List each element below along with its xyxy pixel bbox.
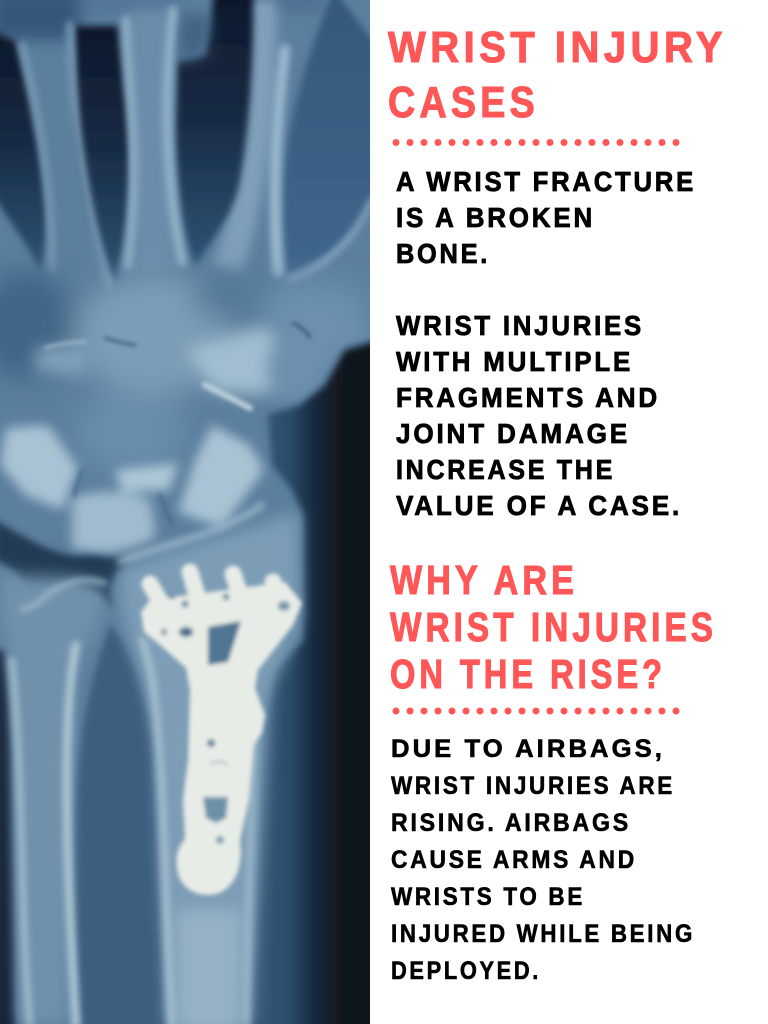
dark surround on right side [250,340,380,1024]
text block: airbags: CAUSE ARMS AND [391,846,637,874]
wrist joint gap and forearm void [0,520,165,1024]
dotted divider 1 [396,139,677,146]
text block: airbags: WRISTS TO BE [391,883,585,911]
heading: why on the rise [390,557,717,697]
title [388,23,727,127]
text block: airbags: DUE TO AIRBAGS, [391,735,665,763]
text block: definition: A WRIST FRACTURE [396,166,696,197]
carpal bones [0,270,370,553]
ulna and radius bones [0,505,300,1024]
text block: case value: VALUE OF A CASE. [396,490,682,521]
metal plate implant [141,572,302,895]
text block: definition: BONE. [396,238,490,269]
text block: airbags: RISING. AIRBAGS [391,809,631,837]
text block: airbags: WRIST INJURIES ARE [391,772,675,800]
text block: case value: JOINT DAMAGE [396,418,630,449]
dotted divider 2 [396,708,677,714]
text block: case value: WRIST INJURIES [396,310,644,341]
x-ray photo of a wrist with metal plate [0,0,380,1024]
text block: airbags: DEPLOYED. [391,957,541,985]
text block: case value: INCREASE THE [396,454,615,485]
title: WRIST INJURY [388,23,727,72]
heading: why on the rise: ON THE RISE? [390,651,666,697]
text block: definition: IS A BROKEN [396,202,595,233]
heading: why on the rise: WHY ARE [390,557,578,603]
title: CASES [388,78,539,127]
text block: case value [396,310,682,521]
text block: case value: WITH MULTIPLE [396,346,633,377]
text block: airbags: INJURED WHILE BEING [391,920,695,948]
text block: airbags [391,735,695,985]
text block: case value: FRAGMENTS AND [396,382,660,413]
right text panel [388,23,727,985]
text block: definition [396,166,696,269]
hand bones and finger voids [0,0,380,288]
